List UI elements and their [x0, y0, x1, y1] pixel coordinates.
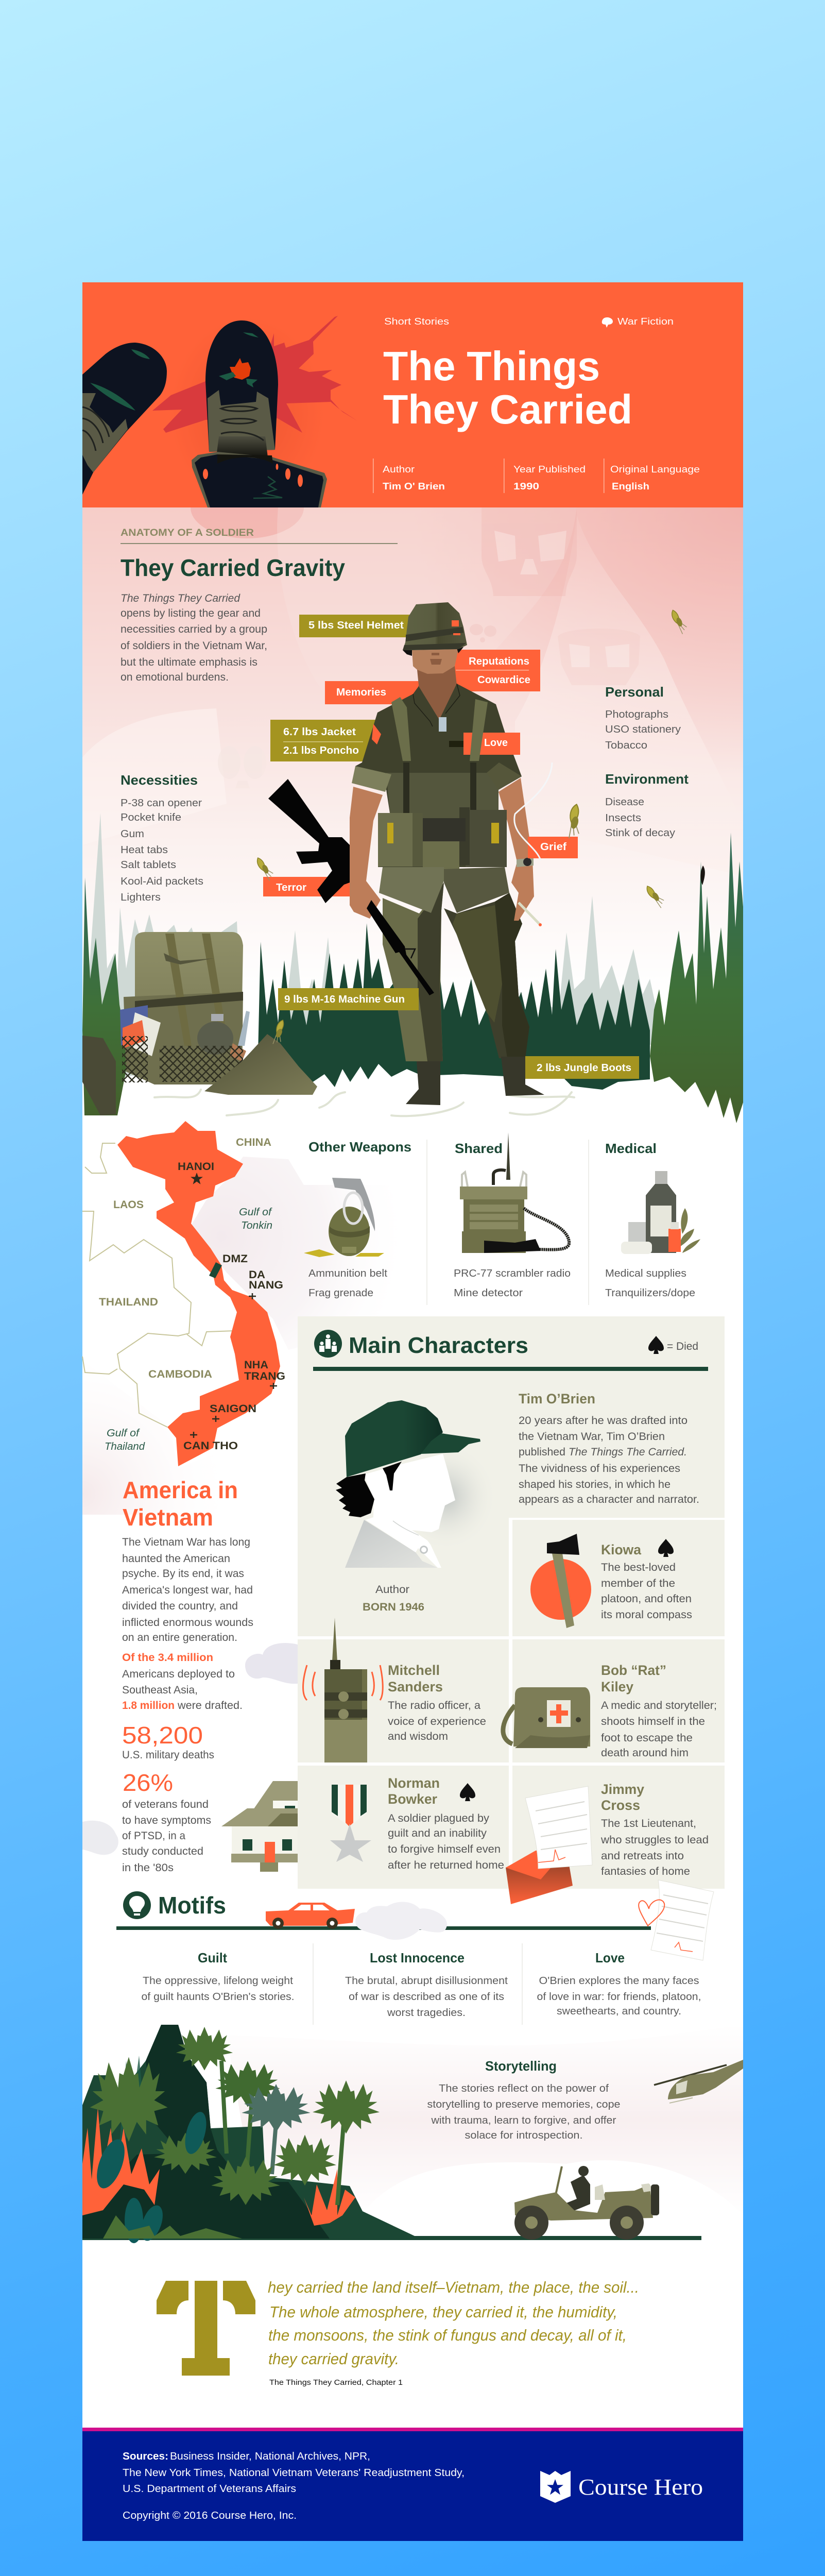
- grass green left: [82, 877, 129, 1115]
- label: love: Love: [484, 737, 508, 749]
- paragraph: inflicted enormous wounds: [122, 1616, 253, 1629]
- map labels: TRANG: [244, 1370, 285, 1382]
- motif: guilt: Guilt: [198, 1950, 227, 1965]
- intro paragraph: but the ultimate emphasis is: [121, 656, 257, 668]
- character: jimmy cross: fantasies of home: [601, 1865, 690, 1877]
- water ripples: [154, 1090, 574, 1116]
- label: memories: Memories: [336, 687, 386, 698]
- icon: cloud: [355, 1902, 447, 1940]
- legend: died: = Died: [667, 1340, 698, 1352]
- character: tim o'brien: 20 years after he was drafted into: [519, 1414, 688, 1427]
- character: norman bowker: to forgive himself even: [388, 1843, 501, 1855]
- header tags: Short Stories: [384, 316, 449, 327]
- map labels: CAMBODIA: [148, 1368, 212, 1380]
- motif: love: [537, 1950, 701, 2017]
- icon: mosquito: [269, 1019, 289, 1046]
- character: mitchell sanders: Mitchell: [388, 1663, 440, 1678]
- character: tim o'brien: the Vietnam War, Tim O’Brien: [519, 1430, 665, 1443]
- book metadata: Tim O' Brien: [383, 481, 445, 492]
- stat: deaths: [122, 1722, 214, 1761]
- small skull marks: [470, 624, 496, 642]
- motif: storytelling: storytelling to preserve memories, cope: [427, 2098, 620, 2110]
- character: mitchell sanders: The radio officer, a: [388, 1699, 480, 1711]
- label: 5 lbs steel helmet: 5 lbs Steel Helmet: [308, 620, 404, 631]
- list: necessities: P-38 can opener: [121, 797, 202, 809]
- icon: grenade: [304, 1178, 384, 1257]
- label: reputations and cowardice: Reputations: [469, 656, 529, 667]
- footer: [82, 2428, 743, 2541]
- character: norman bowker: Norman: [388, 1775, 440, 1791]
- character: tim o'brien: BORN 1946: [363, 1601, 424, 1613]
- map labels: THAILAND: [99, 1296, 158, 1308]
- grass green right: [650, 833, 743, 1123]
- list: necessities: [121, 772, 203, 903]
- map labels: CHINA: [236, 1137, 271, 1148]
- character: tim o'brien: appears as a character and narrator.: [519, 1493, 699, 1505]
- soldier figure: [268, 602, 544, 1105]
- header panel: [82, 282, 743, 507]
- heading: Vietnam: [123, 1504, 213, 1531]
- book metadata: [373, 459, 700, 493]
- label: m-16 machine gun: 9 lbs M-16 Machine Gun: [284, 994, 405, 1005]
- sea wash: [191, 1157, 412, 1350]
- column: other weapons: Frag grenade: [308, 1287, 373, 1299]
- pink haze: [227, 2025, 743, 2215]
- character: kiowa: The best-loved: [601, 1561, 676, 1573]
- drop cap: [157, 2281, 255, 2376]
- map labels: [99, 1137, 285, 1452]
- attribution: The Things They Carried, Chapter 1: [269, 2378, 403, 2387]
- motif: guilt: of guilt haunts O'Brien's stories.: [141, 1991, 295, 2003]
- country borders: [82, 1143, 235, 1427]
- icon: mosquito: [645, 883, 666, 910]
- paragraph: America's longest war, had: [122, 1584, 253, 1596]
- column: other weapons: Ammunition belt: [308, 1267, 387, 1279]
- icon: butterfly: [700, 866, 705, 885]
- column: medical: Tranquilizers/dope: [605, 1287, 695, 1299]
- intro paragraph: necessities carried by a group: [121, 623, 267, 635]
- character: kiowa: member of the: [601, 1577, 675, 1589]
- list: personal: USO stationery: [605, 723, 681, 735]
- panel: motifs: [82, 1880, 743, 2244]
- map labels: NHA: [244, 1359, 268, 1371]
- column: other weapons: [304, 1139, 411, 1299]
- hair: [403, 647, 463, 656]
- label: memories: [325, 681, 423, 704]
- quote text: [268, 2278, 639, 2368]
- icon: characters: [314, 1330, 342, 1358]
- column: medical: Medical supplies: [605, 1267, 686, 1279]
- copyright: Copyright © 2016 Course Hero, Inc.: [123, 2510, 297, 2521]
- list: necessities: Necessities: [121, 772, 198, 788]
- list: necessities: Heat tabs: [121, 844, 168, 856]
- character: jimmy cross: Cross: [601, 1798, 640, 1813]
- character: bob rat kiley: [503, 1663, 717, 1759]
- neck: [414, 666, 463, 720]
- panel: quote: [157, 2278, 639, 2387]
- character: mitchell sanders: Sanders: [388, 1679, 443, 1694]
- motif: love: sweethearts, and country.: [557, 2005, 681, 2017]
- sources: Sources:: [123, 2451, 168, 2462]
- flames: [82, 2107, 355, 2226]
- map labels: CAN THO: [183, 1440, 238, 1452]
- list: environment: [605, 771, 689, 839]
- palm trunks: [221, 2061, 344, 2205]
- icon: medal: [330, 1785, 371, 1862]
- motif: storytelling: [427, 2058, 620, 2141]
- list: necessities: Kool-Aid packets: [121, 875, 203, 887]
- boots: [406, 1061, 440, 1105]
- map labels: DMZ: [222, 1253, 248, 1265]
- list: environment: Stink of decay: [605, 827, 676, 839]
- label: love: [463, 733, 520, 755]
- sleeve stripes: [372, 724, 381, 744]
- sources: Business Insider, National Archives, NPR,: [170, 2451, 370, 2462]
- left shoulder strap: [391, 697, 411, 761]
- intro paragraph: The Things They Carried: [121, 592, 240, 604]
- icon: walkie talkie: [303, 1618, 383, 1762]
- column: shared: PRC-77 scrambler radio: [454, 1267, 571, 1279]
- icon: medical supplies: [621, 1171, 700, 1254]
- motif: storytelling: The stories reflect on the power of: [439, 2082, 609, 2094]
- character: bob rat kiley: Kiley: [601, 1679, 633, 1694]
- list: environment: Disease: [605, 796, 644, 808]
- motif: storytelling: Storytelling: [485, 2058, 557, 2074]
- icon: radio: [460, 1132, 569, 1253]
- motif: lost innocence: of war is described as one of its: [349, 1991, 504, 2003]
- icon: cloud: [82, 1821, 118, 1855]
- map labels: Thailand: [105, 1441, 145, 1452]
- big rifle: [268, 779, 350, 903]
- panel: america in vietnam: [82, 1477, 298, 1874]
- stat: drafted: Americans deployed to: [122, 1668, 235, 1680]
- motif: guilt: The oppressive, lifelong weight: [143, 1975, 293, 1987]
- stat: drafted: Of the 3.4 million: [122, 1651, 213, 1664]
- label: terror: [263, 877, 350, 896]
- right lower strap: [470, 762, 476, 814]
- paragraph: on an entire generation.: [122, 1631, 237, 1643]
- map labels: NANG: [249, 1279, 283, 1291]
- character: kiowa: Kiowa: [601, 1542, 642, 1557]
- intro paragraph: of soldiers in the Vietnam War,: [121, 639, 267, 652]
- map of vietnam: [82, 1121, 412, 1515]
- sources: The New York Times, National Vietnam Veterans' Readjustment Study,: [123, 2467, 465, 2479]
- motif: lost innocence: worst tragedies.: [387, 2007, 466, 2019]
- character: jimmy cross: Jimmy: [601, 1782, 644, 1797]
- character: jimmy cross: [600, 1782, 709, 1877]
- dmz bar: [209, 1262, 222, 1278]
- icon: backpack: [120, 932, 250, 1084]
- map labels: Tonkin: [241, 1220, 272, 1231]
- stat: drafted: Southeast Asia,: [122, 1684, 198, 1696]
- left arm: [350, 787, 383, 919]
- motif: love: Love: [595, 1950, 625, 1965]
- list: personal: Personal: [605, 684, 664, 700]
- character: kiowa: its moral compass: [601, 1608, 692, 1621]
- title: [383, 343, 632, 432]
- map labels: HANOI: [178, 1161, 214, 1173]
- smoke trail: [514, 762, 552, 860]
- shirt hem left: [379, 867, 444, 913]
- dog tag: [439, 717, 446, 732]
- map labels: Gulf of: [239, 1207, 273, 1218]
- character: bob rat kiley: A medic and storyteller;: [601, 1699, 717, 1711]
- carried rifle: [367, 900, 434, 995]
- book metadata: 1990: [513, 481, 539, 492]
- map labels: SAIGON: [210, 1403, 256, 1415]
- legend: died: [648, 1336, 698, 1354]
- character: tim o'brien: shaped his stories, in which he: [519, 1478, 671, 1490]
- grass dark centre: [257, 923, 650, 1092]
- icon: heart: [639, 1900, 664, 1926]
- icon: car: [266, 1903, 355, 1929]
- stat: ptsd: [122, 1769, 211, 1874]
- character: mitchell sanders: and wisdom: [388, 1730, 448, 1742]
- background skull: [482, 507, 577, 596]
- list: environment: Environment: [605, 771, 689, 787]
- stat: ptsd: study conducted: [122, 1845, 203, 1857]
- book metadata: Original Language: [610, 464, 700, 474]
- paragraph: divided the country, and: [122, 1600, 238, 1612]
- column: shared: Mine detector: [454, 1287, 523, 1299]
- stat: ptsd: of PTSD, in a: [122, 1829, 185, 1842]
- section kicker: ANATOMY OF A SOLDIER: [121, 528, 254, 538]
- character: tim o'brien: [336, 1391, 699, 1613]
- heading: Motifs: [158, 1892, 226, 1919]
- label: grief: [528, 837, 578, 858]
- quote text: The whole atmosphere, they carried it, the humidity,: [269, 2303, 617, 2321]
- label: 5 lbs steel helmet: [299, 615, 415, 637]
- column: other weapons: Other Weapons: [308, 1139, 411, 1155]
- book metadata: Author: [383, 464, 415, 474]
- label: m-16 machine gun: [278, 988, 419, 1010]
- character: tim o'brien: The vividness of his experiences: [519, 1462, 680, 1475]
- map labels: DA: [249, 1269, 265, 1281]
- stat: ptsd: of veterans found: [122, 1798, 209, 1810]
- column: medical: Medical: [605, 1141, 657, 1156]
- list: personal: Tobacco: [605, 739, 647, 751]
- paragraph: haunted the American: [122, 1552, 230, 1565]
- stat: drafted: were drafted.: [177, 1699, 243, 1711]
- heading: Main Characters: [349, 1333, 528, 1358]
- quote text: the monsoons, the stink of fungus and decay, all of it,: [268, 2326, 627, 2344]
- character: bob rat kiley: death around him: [601, 1747, 689, 1759]
- stat: deaths: 58,200: [122, 1722, 203, 1749]
- book metadata: Year Published: [513, 464, 586, 474]
- title: The Things: [383, 343, 600, 389]
- character: norman bowker: Bowker: [388, 1791, 437, 1807]
- column: shared: Shared: [455, 1141, 503, 1156]
- panel: anatomy of a soldier: [82, 507, 743, 1123]
- character: jimmy cross: and retreats into: [601, 1850, 684, 1862]
- stump left: [82, 1036, 116, 1115]
- label: reputations and cowardice: Cowardice: [477, 674, 530, 686]
- motif: storytelling: solace for introspection.: [465, 2129, 583, 2141]
- right arm: [499, 778, 534, 921]
- header tags: War Fiction: [617, 316, 674, 327]
- stat: ptsd: to have symptoms: [122, 1814, 211, 1826]
- map labels: LAOS: [113, 1199, 144, 1211]
- panel: main characters: [298, 1316, 725, 1889]
- stat: deaths: U.S. military deaths: [122, 1749, 214, 1761]
- character: norman bowker: guilt and an inability: [388, 1827, 487, 1839]
- character: bob rat kiley: shoots himself in the: [601, 1715, 705, 1727]
- character: bob rat kiley: foot to escape the: [601, 1732, 693, 1744]
- jacket torso: [355, 684, 522, 867]
- leaves: [91, 2110, 210, 2244]
- quote text: they carried gravity.: [268, 2350, 399, 2368]
- shirt hem right: [444, 867, 509, 913]
- paragraph: The Vietnam War has long: [122, 1536, 250, 1548]
- intro paragraph: opens by listing the gear and: [121, 607, 261, 619]
- icon: sandbag mound: [204, 1034, 317, 1095]
- watch: [517, 858, 534, 867]
- portrait: [336, 1400, 497, 1568]
- character: norman bowker: [330, 1775, 504, 1871]
- icon: medic bag: [503, 1687, 590, 1748]
- icon: axe: [530, 1534, 591, 1628]
- icon: mosquito: [564, 803, 586, 840]
- column: shared: [454, 1132, 571, 1299]
- intro paragraph: on emotional burdens.: [121, 671, 229, 683]
- intro paragraph: [121, 592, 267, 683]
- list: personal: Photographs: [605, 708, 668, 720]
- character: tim o'brien: published The Things The Carried.: [519, 1446, 687, 1458]
- quote text: hey carried the land itself–Vietnam, the place, the soil...: [268, 2278, 639, 2296]
- motif: lost innocence: [345, 1950, 508, 2019]
- background hill: [277, 507, 577, 701]
- list: necessities: Salt tablets: [121, 859, 176, 871]
- jungle illustration: [82, 2025, 701, 2244]
- icon: blood splatter: [152, 316, 357, 433]
- label: terror: Terror: [276, 882, 306, 893]
- heading: [123, 1477, 238, 1531]
- paragraph: [122, 1536, 253, 1643]
- legs: [383, 883, 444, 1061]
- character: mitchell sanders: [303, 1618, 486, 1762]
- motif: lost innocence: Lost Innocence: [370, 1950, 465, 1965]
- character: mitchell sanders: voice of experience: [388, 1715, 486, 1727]
- title: They Carried: [383, 386, 632, 432]
- list: environment: Insects: [605, 812, 641, 824]
- stat: ptsd: in the '80s: [122, 1861, 174, 1874]
- label: reputations and cowardice: [448, 650, 540, 691]
- stat: ptsd: 26%: [123, 1769, 173, 1796]
- vietnam shape: [117, 1121, 280, 1466]
- character: jimmy cross: The 1st Lieutenant,: [601, 1817, 696, 1829]
- heading: They Carried Gravity: [121, 554, 345, 581]
- logo: course hero: Course Hero: [578, 2475, 703, 2500]
- shirt belly: [423, 841, 459, 869]
- list: necessities: Lighters: [121, 891, 161, 903]
- label: jacket and poncho: 6.7 lbs Jacket: [283, 726, 356, 738]
- motif: love: of love in war: for friends, platoon,: [537, 1991, 701, 2003]
- paragraph: psyche. By its end, it was: [122, 1567, 244, 1580]
- map labels: Gulf of: [107, 1428, 141, 1439]
- palms: [176, 2027, 233, 2071]
- icon: mosquito: [255, 855, 276, 883]
- icon: jeep: [514, 2166, 659, 2240]
- heading: America in: [123, 1477, 238, 1503]
- background grass light: [85, 813, 664, 1082]
- sources: [123, 2451, 465, 2495]
- label: jacket and poncho: [270, 720, 375, 761]
- icon: envelope: [506, 1850, 573, 1904]
- character: kiowa: platoon, and often: [601, 1592, 692, 1605]
- label: jungle boots: 2 lbs Jungle Boots: [537, 1062, 631, 1074]
- book metadata: English: [612, 481, 649, 492]
- icon: light bulb: [123, 1891, 151, 1919]
- ammo pouches: [378, 813, 423, 867]
- list: necessities: Gum: [121, 828, 144, 840]
- label: jacket and poncho: 2.1 lbs Poncho: [283, 745, 359, 756]
- character: kiowa: [530, 1534, 692, 1628]
- icon: love letter: [651, 1880, 714, 1960]
- character: tim o'brien: Author: [375, 1583, 409, 1596]
- icon: helicopter: [654, 2060, 743, 2103]
- character: bob rat kiley: Bob “Rat”: [601, 1663, 666, 1678]
- stat: drafted: 1.8 million: [122, 1699, 175, 1711]
- column: medical: [605, 1141, 700, 1299]
- motif: lost innocence: The brutal, abrupt disillusionment: [345, 1975, 508, 1987]
- label: jungle boots: [525, 1056, 639, 1079]
- left sleeve cuff: [352, 766, 391, 792]
- label: grief: Grief: [540, 841, 566, 853]
- icon: right boot: [192, 320, 327, 507]
- icon: mosquito: [671, 608, 689, 635]
- stat: drafted: [122, 1651, 243, 1711]
- logo: course hero: [540, 2471, 703, 2503]
- icon: cloud: [245, 1643, 298, 1684]
- helmet: [403, 602, 467, 650]
- character: jimmy cross: who struggles to lead: [600, 1834, 709, 1846]
- chest collar: [413, 684, 460, 726]
- sources: U.S. Department of Veterans Affairs: [123, 2483, 296, 2495]
- list: necessities: Pocket knife: [121, 811, 181, 823]
- character: norman bowker: after he returned home: [388, 1859, 504, 1871]
- list: personal: [605, 684, 681, 751]
- character: norman bowker: A soldier plagued by: [388, 1812, 489, 1824]
- cigarette: [519, 903, 540, 925]
- character: tim o'brien: Tim O’Brien: [519, 1391, 595, 1406]
- motif: love: O'Brien explores the many faces: [539, 1975, 699, 1987]
- icon: left boot: [82, 343, 167, 495]
- background skull small: [558, 629, 640, 685]
- pale skull left: [218, 746, 266, 788]
- icon: house: [221, 1781, 298, 1872]
- face: [412, 649, 458, 674]
- motif: storytelling: with trauma, learn to forgive, and offer: [431, 2114, 616, 2126]
- motif: guilt: [141, 1950, 295, 2003]
- right shoulder strap: [470, 699, 488, 761]
- header tags: [384, 316, 674, 328]
- icon: letter: [525, 1786, 592, 1869]
